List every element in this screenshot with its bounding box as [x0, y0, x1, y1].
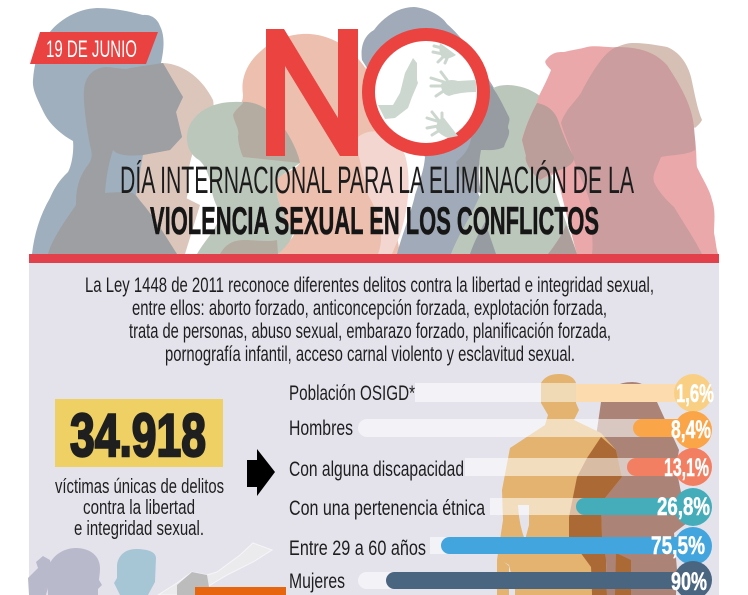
- row: Con alguna discapacidad 13,1%: 13,1%: [664, 454, 709, 482]
- silhouette: green person: [451, 85, 577, 254]
- icon: hand centre: [431, 72, 476, 96]
- stat caption: contra la libertad: [83, 497, 195, 519]
- row: Entre 29 a 60 años 75,5%: Entre 29 a 60 años: [289, 537, 426, 560]
- silhouette: green child: [187, 102, 300, 254]
- row: Población OSIGD 1,6%: 1,6%: [676, 380, 714, 408]
- silhouette: lower overlap: [548, 225, 577, 254]
- row: Entre 29 a 60 años 75,5%: [289, 527, 712, 565]
- silhouette: mauve overlap: [561, 47, 702, 254]
- silhouette: light pink: [355, 131, 409, 254]
- row: Población OSIGD 1,6%: [289, 374, 714, 412]
- figure: gap at hand: [504, 562, 515, 595]
- silhouette: taupe shoulder: [220, 240, 278, 254]
- row: Hombres 8,4%: 8,4%: [671, 416, 711, 444]
- silhouette: salmon woman: [233, 34, 400, 254]
- row: Hombres 8,4%: [289, 411, 712, 449]
- people chart figures: [497, 374, 687, 595]
- icon: hand top: [433, 43, 456, 63]
- red divider band: [29, 254, 719, 263]
- icon: hand bottom: [427, 112, 458, 138]
- map: gray department: [177, 572, 209, 595]
- silhouette: tan man lower: [150, 190, 200, 254]
- row: Con alguna discapacidad 13,1%: [289, 448, 712, 486]
- row: Con una pertenencia étnica 26,8%: [289, 488, 712, 526]
- row: Mujeres 90%: [289, 561, 712, 595]
- row: Con una pertenencia étnica 26,8%: 26,8%: [657, 493, 710, 521]
- row: Entre 29 a 60 años 75,5%: 75,5%: [651, 532, 705, 560]
- stat caption: e integridad sexual.: [74, 518, 204, 540]
- silhouette: slate shoulder: [470, 222, 496, 254]
- silhouette: pink woman: [522, 46, 718, 254]
- panel: background: [29, 254, 719, 595]
- map: Colombia fragment: [158, 543, 272, 595]
- heading: NO letter O with hands: [368, 34, 484, 150]
- date ribbon: 19 DE JUNIO: [46, 36, 137, 63]
- stat caption: [55, 476, 224, 540]
- row: Hombres 8,4%: Hombres: [289, 417, 353, 440]
- silhouette: tan man: [48, 63, 214, 254]
- silhouette: blue woman: [32, 8, 183, 254]
- figure: man right hand: [615, 553, 631, 595]
- icon: man silhouette: [114, 549, 156, 595]
- row: Con alguna discapacidad 13,1%: Con alguna discapacidad: [289, 458, 464, 481]
- silhouette: slate person: [362, 7, 509, 254]
- silhouette: green and pink overlap: [522, 103, 574, 180]
- arrow: [247, 449, 275, 496]
- stat caption: víctimas únicas de delitos: [55, 476, 224, 498]
- silhouette: dark overlap: [456, 85, 509, 193]
- figure: man: [497, 374, 622, 595]
- figure: woman: [569, 382, 687, 595]
- row: Con una pertenencia étnica 26,8%: Con una pertenencia étnica: [289, 497, 485, 520]
- figure: gap between arm and body: [518, 505, 529, 540]
- date ribbon: [30, 32, 158, 64]
- intro text block: [85, 274, 654, 366]
- stat box: total victims: 34.918: [70, 402, 206, 469]
- callout: orange box: [195, 587, 286, 595]
- icon: ponytail: [28, 556, 52, 595]
- icon: raised hand: [378, 58, 418, 119]
- icon: woman silhouette: [47, 548, 102, 595]
- row: Población OSIGD 1,6%: Población OSIGD*: [289, 382, 415, 405]
- intro text block: pornografía infantil, acceso carnal violento y esclavitud sexual.: [165, 343, 575, 366]
- figure: overlap: [569, 437, 622, 595]
- bottom silhouettes and map: [28, 543, 286, 595]
- row: Mujeres 90%: Mujeres: [289, 570, 345, 593]
- heading: NO letter N: [266, 29, 358, 156]
- silhouette: tan hair: [617, 43, 702, 128]
- silhouette: gray overlap: [48, 63, 183, 254]
- silhouette: taupe overlap: [233, 102, 300, 163]
- header silhouettes: [32, 7, 718, 254]
